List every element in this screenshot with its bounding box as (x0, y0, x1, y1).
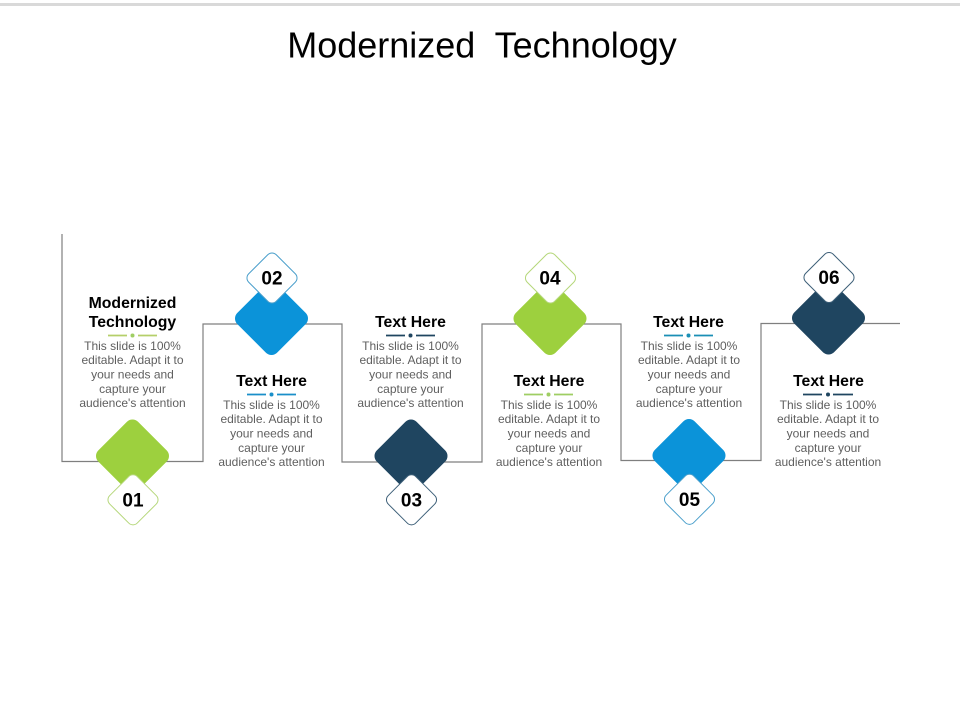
text block 01 (79, 295, 186, 410)
step 03 (357, 314, 464, 527)
text block 03: This slide is 100% (362, 339, 459, 353)
badge 03 (384, 472, 439, 527)
connector line (62, 234, 900, 462)
icon: diamond 04 (510, 279, 590, 358)
step 05 (636, 314, 742, 527)
text block 01: audience's attention (79, 396, 186, 410)
text block 06 (775, 373, 881, 469)
text block 03: editable. Adapt it to (359, 353, 462, 367)
text block 04: This slide is 100% (501, 398, 598, 412)
text block 02: your needs and (230, 426, 313, 440)
text block 03: Text Here (375, 314, 446, 331)
text block 05: This slide is 100% (641, 339, 738, 353)
text block 02: Text Here (236, 373, 307, 390)
badge 05 (662, 472, 717, 527)
text block 04: your needs and (508, 426, 590, 440)
badge 04: 04 (539, 268, 561, 290)
text block 03 (357, 314, 464, 410)
icon: diamond 01 (93, 416, 172, 496)
icon: diamond 06 (789, 278, 868, 358)
badge 01: 01 (122, 490, 144, 512)
badge 06: 06 (818, 268, 840, 289)
text block 05: Text Here (653, 314, 724, 331)
text block 01: This slide is 100% (84, 339, 181, 353)
text block 06: Text Here (793, 373, 864, 390)
icon: diamond 03 (371, 416, 451, 496)
text block 05: audience's attention (636, 396, 742, 410)
text block 01: capture your (99, 382, 166, 396)
text block 02: editable. Adapt it to (220, 412, 323, 426)
step 04 (496, 250, 602, 469)
text block 05: editable. Adapt it to (638, 353, 740, 367)
text block 01: your needs and (91, 368, 174, 382)
step 06 (775, 250, 881, 469)
text block 01: Modernized (89, 295, 176, 312)
text block 02: This slide is 100% (223, 398, 320, 412)
text block 05: your needs and (648, 368, 730, 382)
text block 06: capture your (795, 441, 861, 455)
icon: diamond 02 (232, 279, 311, 358)
text block 03: your needs and (369, 368, 452, 382)
text block 04: audience's attention (496, 455, 602, 469)
text block 02: capture your (238, 441, 305, 455)
text block 03: audience's attention (357, 396, 464, 410)
badge 05: 05 (679, 490, 700, 511)
text block 06: your needs and (787, 426, 869, 440)
step 02 (218, 250, 325, 469)
title: Modernized Technology (287, 24, 677, 66)
text block 03: capture your (377, 382, 444, 396)
text block 04: Text Here (514, 373, 585, 390)
text block 04: editable. Adapt it to (498, 412, 600, 426)
badge 02 (244, 250, 300, 306)
badge 02: 02 (261, 268, 283, 290)
text block 01: editable. Adapt it to (81, 353, 184, 367)
text block 01: Technology (89, 314, 176, 331)
text block 06: This slide is 100% (780, 398, 877, 412)
step 01 (79, 295, 186, 527)
text block 06: audience's attention (775, 455, 881, 469)
text block 05 (636, 314, 742, 410)
text block 05: capture your (656, 382, 722, 396)
text block 02 (218, 373, 325, 469)
badge 04 (523, 250, 578, 306)
text block 04 (496, 373, 602, 469)
icon: diamond 05 (649, 416, 729, 495)
text block 04: capture your (516, 441, 582, 455)
text block 06: editable. Adapt it to (777, 412, 879, 426)
badge 03: 03 (401, 490, 422, 512)
badge 06 (801, 250, 857, 305)
text block 02: audience's attention (218, 455, 325, 469)
badge 01 (105, 472, 161, 527)
